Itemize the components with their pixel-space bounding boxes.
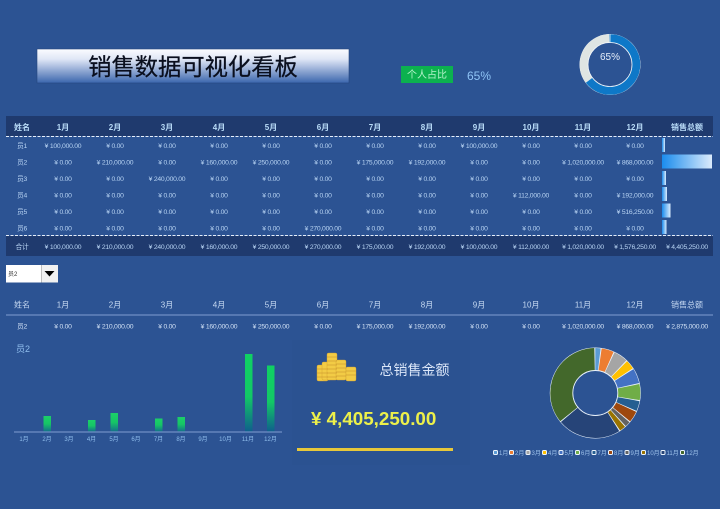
table row: 员2 (17, 158, 654, 166)
month labels: 8月 (176, 436, 186, 443)
donut legend: 12月 (686, 450, 699, 457)
table row: 员2: ¥ 1,020,000.00 (562, 160, 604, 166)
table row: 员5: ¥ 0.00 (522, 209, 540, 216)
table row: 员5: ¥ 516,250.00 (617, 209, 654, 216)
month labels: 2月 (42, 436, 52, 443)
table row: 员4: ¥ 0.00 (262, 192, 280, 200)
table row: 员4: ¥ 192,000.00 (617, 192, 654, 200)
selected table header: 2月 (109, 300, 121, 310)
table row: 员6: ¥ 0.00 (470, 226, 488, 232)
table row: 员5: ¥ 0.00 (158, 209, 176, 216)
selected table row: 员2: 员2 (17, 322, 28, 330)
table row: 员5: ¥ 0.00 (418, 209, 436, 216)
selected table header: 5月 (265, 300, 277, 310)
table row: 员3 (17, 175, 644, 183)
donut legend: 11月 (666, 450, 679, 457)
underline (297, 448, 453, 451)
total row: ¥ 112,000.00 (513, 244, 550, 251)
total sales label: 总销售金额 (380, 362, 450, 378)
donut legend: 9月 (630, 450, 640, 457)
total row: ¥ 100,000.00 (45, 244, 82, 251)
table row: 员6: ¥ 270,000.00 (305, 226, 342, 232)
table row: 员5: ¥ 0.00 (106, 209, 124, 216)
main table header: 11月 (575, 123, 591, 132)
total row: ¥ 192,000.00 (409, 244, 446, 251)
table row: 员3: ¥ 0.00 (314, 176, 332, 183)
total row: ¥ 240,000.00 (149, 244, 186, 251)
main table header: 5月 (265, 123, 277, 132)
table row: 员6: ¥ 0.00 (522, 226, 540, 232)
table row: 员3: ¥ 0.00 (522, 176, 540, 183)
table row: 员1: ¥ 0.00 (626, 143, 644, 150)
selected table row: 员2: ¥ 175,000.00 (357, 324, 394, 330)
selected table header: 7月 (369, 300, 381, 310)
employee dropdown (6, 265, 58, 282)
table row: 员2: ¥ 0.00 (158, 160, 176, 166)
selected table row: 员2: ¥ 868,000.00 (617, 324, 654, 330)
table row: 员6: ¥ 0.00 (626, 226, 644, 232)
selected table row: 员2: ¥ 210,000.00 (97, 324, 134, 330)
table row: 员3: ¥ 0.00 (106, 176, 124, 183)
table row: 员2: 员2 (17, 158, 28, 166)
month labels: 5月 (109, 436, 119, 443)
main table header: 7月 (369, 123, 381, 132)
total sales value: ¥ 4,405,250.00 (311, 408, 436, 429)
donut legend: 6月 (581, 450, 590, 457)
selected table header: 姓名 (14, 300, 30, 310)
selected table header: 8月 (421, 300, 433, 310)
selected table header (14, 300, 703, 310)
table row: 员4: ¥ 0.00 (210, 192, 228, 200)
data bars: sales totals (662, 138, 712, 234)
main table header: 6月 (317, 123, 329, 132)
main table header: 9月 (473, 123, 485, 132)
personal share tag (401, 66, 453, 83)
main table header: 销售总额 (671, 122, 703, 132)
month labels: 7月 (154, 436, 163, 443)
table row: 员6: ¥ 0.00 (54, 226, 72, 232)
main table header: 4月 (213, 123, 225, 132)
table row: 员3: ¥ 0.00 (418, 176, 436, 183)
donut chart: monthly share (550, 348, 641, 438)
table row: 员3: ¥ 0.00 (262, 176, 280, 183)
table row: 员6: ¥ 0.00 (210, 226, 228, 232)
table row: 员2: ¥ 210,000.00 (97, 160, 134, 166)
selected table header: 10月 (523, 300, 539, 310)
table row: 员2: ¥ 250,000.00 (253, 160, 290, 166)
table row: 员6 (17, 224, 644, 232)
table row: 员4: ¥ 0.00 (106, 192, 124, 200)
month labels: 4月 (87, 436, 96, 443)
total row: ¥ 100,000.00 (461, 244, 498, 251)
table row: 员5: ¥ 0.00 (574, 209, 592, 216)
table row: 员4: ¥ 0.00 (54, 192, 72, 200)
table row: 员4: ¥ 112,000.00 (513, 192, 550, 200)
total row: ¥ 1,576,250.00 (614, 244, 656, 251)
table row: 员4: 员4 (17, 192, 28, 200)
personal share value: 65% (467, 69, 491, 83)
table row: 员1: ¥ 0.00 (210, 143, 228, 150)
table row: 员1: ¥ 0.00 (574, 143, 592, 150)
donut legend: 4月 (548, 450, 557, 457)
table row: 员4 (17, 192, 654, 200)
main table header: 2月 (109, 123, 121, 132)
table row: 员1: ¥ 0.00 (366, 143, 384, 150)
table row: 员5: ¥ 0.00 (470, 209, 488, 216)
main table header: 12月 (627, 123, 643, 132)
month labels: 9月 (198, 436, 208, 443)
month labels: 3月 (64, 436, 74, 443)
title banner: 销售数据可视化看板 (88, 54, 298, 80)
donut legend: 7月 (598, 450, 607, 457)
total row: ¥ 1,020,000.00 (562, 244, 604, 251)
table row: 员3: ¥ 0.00 (470, 176, 488, 183)
table row: 员6: ¥ 0.00 (262, 226, 280, 232)
table row: 员5: ¥ 0.00 (314, 209, 332, 216)
selected table row: 员2: ¥ 0.00 (54, 324, 72, 330)
donut: personal share 65%: 65% (600, 52, 620, 63)
selected table row: 员2: ¥ 0.00 (314, 324, 332, 330)
main table header: 1月 (57, 123, 69, 132)
table row: 员1: ¥ 0.00 (522, 143, 540, 150)
panel: total sales (292, 340, 470, 465)
bars (44, 354, 274, 432)
table row: 员6: ¥ 0.00 (366, 226, 384, 232)
main table header: 8月 (421, 123, 433, 132)
table row: 员6: ¥ 0.00 (158, 226, 176, 232)
table row: 员1: ¥ 100,000.00 (461, 143, 498, 150)
selected table row: 员2: ¥ 0.00 (158, 324, 176, 330)
total row: 合计 (15, 242, 29, 251)
total row: ¥ 250,000.00 (253, 244, 290, 251)
table row: 员1: ¥ 0.00 (418, 143, 436, 150)
total row: ¥ 160,000.00 (201, 244, 238, 251)
total row: ¥ 270,000.00 (305, 244, 342, 251)
table row: 员3: 员3 (17, 175, 28, 183)
table row: 员2: ¥ 175,000.00 (357, 160, 394, 166)
main table header (6, 116, 713, 136)
selected table row: 员2: ¥ 160,000.00 (201, 324, 238, 330)
table row: 员2: ¥ 192,000.00 (409, 160, 446, 166)
table row: 员1: ¥ 0.00 (262, 143, 280, 150)
table row: 员3: ¥ 240,000.00 (149, 176, 186, 183)
selected table row: 员2: ¥ 0.00 (470, 324, 488, 330)
main table header: 10月 (523, 123, 539, 132)
table row: 员2: ¥ 0.00 (470, 160, 488, 166)
table row: 员6: ¥ 0.00 (574, 226, 592, 232)
title banner (37, 49, 349, 83)
table row: 员5 (17, 208, 654, 216)
main table header: 姓名 (14, 122, 30, 132)
icon: gold coins (317, 353, 356, 381)
table row: 员1: 员1 (17, 142, 28, 150)
table row: 员6: 员6 (17, 224, 28, 232)
selected table header: 销售总额 (671, 300, 703, 310)
table row: 员5: 员5 (17, 208, 28, 216)
table row: 员2: ¥ 0.00 (314, 160, 332, 166)
selected table header: 3月 (161, 300, 173, 310)
selected table row: 员2: ¥ 0.00 (522, 324, 540, 330)
table row: 员5: ¥ 0.00 (210, 209, 228, 216)
month labels (19, 436, 277, 443)
table row: 员1: ¥ 0.00 (158, 143, 176, 150)
table row: 员2: ¥ 868,000.00 (617, 160, 654, 166)
employee dropdown: 员2 (8, 271, 18, 278)
selected table row: 员2: ¥ 250,000.00 (253, 324, 290, 330)
donut legend: 10月 (647, 450, 660, 457)
month labels: 11月 (242, 436, 254, 443)
selected table header: 1月 (57, 300, 69, 310)
table row: 员5: ¥ 0.00 (262, 209, 280, 216)
selected table row: 员2: ¥ 2,875,000.00 (666, 324, 708, 330)
total row: ¥ 210,000.00 (97, 244, 134, 251)
bar chart: 员2 monthly sales (14, 344, 282, 443)
table row: 员3: ¥ 0.00 (54, 176, 72, 183)
total row (6, 236, 713, 256)
table row: 员5: ¥ 0.00 (366, 209, 384, 216)
table row: 员2: ¥ 0.00 (522, 160, 540, 166)
donut legend: 3月 (532, 450, 541, 457)
donut: personal share 65% (580, 34, 640, 95)
month labels: 1月 (19, 436, 29, 443)
table row: 员4: ¥ 0.00 (366, 192, 384, 200)
total row: ¥ 175,000.00 (357, 244, 394, 251)
selected table header: 6月 (317, 300, 329, 310)
donut legend (494, 450, 699, 457)
main table header: 3月 (161, 123, 173, 132)
selected table row: 员2: ¥ 192,000.00 (409, 324, 446, 330)
table row: 员1: ¥ 0.00 (314, 143, 332, 150)
table row: 员2: ¥ 160,000.00 (201, 160, 238, 166)
total row: ¥ 4,405,250.00 (666, 244, 708, 251)
table row: 员3: ¥ 0.00 (574, 176, 592, 183)
selected table header: 12月 (627, 300, 643, 310)
table row: 员4: ¥ 0.00 (314, 192, 332, 200)
table row: 员1: ¥ 100,000.00 (45, 143, 82, 150)
month labels: 12月 (264, 436, 277, 443)
selected table header: 11月 (575, 300, 591, 310)
month labels: 6月 (131, 436, 141, 443)
table row: 员5: ¥ 0.00 (54, 209, 72, 216)
donut legend: 5月 (564, 450, 574, 457)
personal share tag: 个人占比 (407, 68, 447, 81)
table row: 员6: ¥ 0.00 (106, 226, 124, 232)
table row: 员3: ¥ 0.00 (366, 176, 384, 183)
month labels: 10月 (219, 436, 232, 443)
selected table header: 4月 (213, 300, 225, 310)
selected table row: 员2 (17, 322, 708, 330)
table row: 员1 (17, 142, 644, 150)
donut legend: 1月 (499, 450, 508, 457)
selected table row: 员2: ¥ 1,020,000.00 (562, 324, 604, 330)
table row: 员4: ¥ 0.00 (470, 192, 488, 200)
table row: 员4: ¥ 0.00 (418, 192, 436, 200)
chart title: 员2 (16, 344, 30, 354)
table row: 员4: ¥ 0.00 (574, 192, 592, 200)
donut legend: 8月 (614, 450, 623, 457)
table row: 员3: ¥ 0.00 (210, 176, 228, 183)
table row: 员1: ¥ 0.00 (106, 143, 124, 150)
table row: 员4: ¥ 0.00 (158, 192, 176, 200)
selected table header: 9月 (473, 300, 485, 310)
donut legend: 2月 (515, 450, 524, 457)
table row: 员3: ¥ 0.00 (626, 176, 644, 183)
table row: 员6: ¥ 0.00 (418, 226, 436, 232)
table row: 员2: ¥ 0.00 (54, 160, 72, 166)
